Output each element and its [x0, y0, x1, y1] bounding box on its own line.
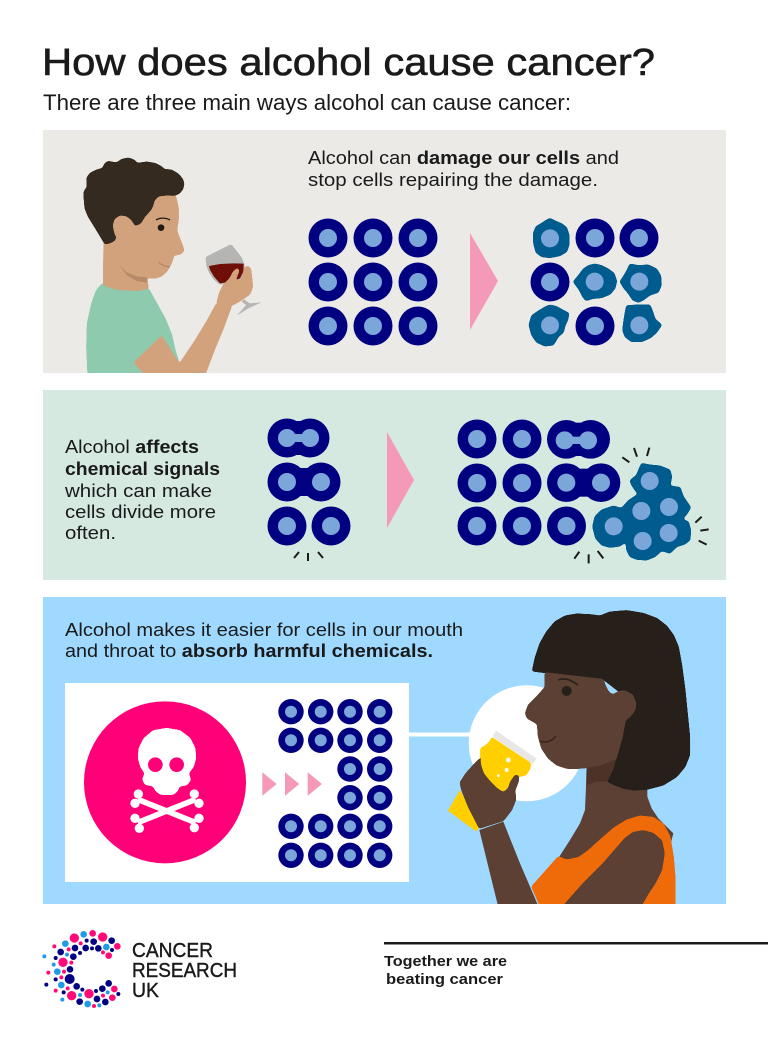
logo: Cancer Research UK — [42, 930, 237, 1008]
healthy cells grid — [308, 218, 438, 346]
text: absorb chemicals: and throat to absorb harmful chemicals. — [65, 640, 433, 661]
title: How does alcohol cause cancer? — [42, 42, 655, 84]
panel: chemical signals — [43, 390, 726, 580]
tagline: beating cancer — [386, 971, 503, 988]
illustration: woman drinking — [448, 611, 690, 913]
icon: skull and crossbones — [84, 701, 246, 863]
text: stop repair: stop cells repairing the damage. — [308, 169, 598, 190]
text: affects chemical signals: cells divide more — [65, 501, 216, 522]
text: affects chemical signals: which can make — [64, 480, 212, 501]
white inset box — [65, 683, 409, 882]
logo wordmark: UK — [132, 980, 160, 1002]
tagline — [384, 942, 768, 988]
text: affects chemical signals: chemical signals — [65, 458, 220, 479]
arrow — [470, 233, 498, 330]
dividing cells — [268, 418, 350, 561]
text: affects chemical signals — [64, 436, 220, 543]
arrow — [387, 432, 414, 528]
text: damage our cells: Alcohol can damage our cells and — [308, 147, 619, 168]
text: affects chemical signals: often. — [65, 522, 116, 543]
logo wordmark: RESEARCH — [132, 960, 237, 982]
panel: damage cells — [43, 130, 726, 383]
cell group with tumour — [458, 420, 709, 563]
logo wordmark: CANCER — [132, 940, 213, 962]
subtitle: There are three main ways alcohol can cause cancer: — [43, 90, 571, 115]
tagline: Together we are — [384, 953, 507, 970]
white zoom circle and connector — [405, 685, 585, 801]
text: mouth and throat: Alcohol makes it easier for cells in our mouth — [65, 619, 463, 640]
panel: absorb harmful chemicals — [43, 597, 726, 913]
illustration: man drinking wine — [84, 158, 262, 383]
text: affects chemical signals: Alcohol affects — [65, 436, 199, 457]
damaged cells grid — [529, 218, 662, 346]
logo wordmark — [132, 940, 237, 1002]
logo mark: dotted C — [42, 930, 121, 1008]
mouth cells grid — [278, 699, 392, 868]
small arrows — [262, 772, 322, 796]
